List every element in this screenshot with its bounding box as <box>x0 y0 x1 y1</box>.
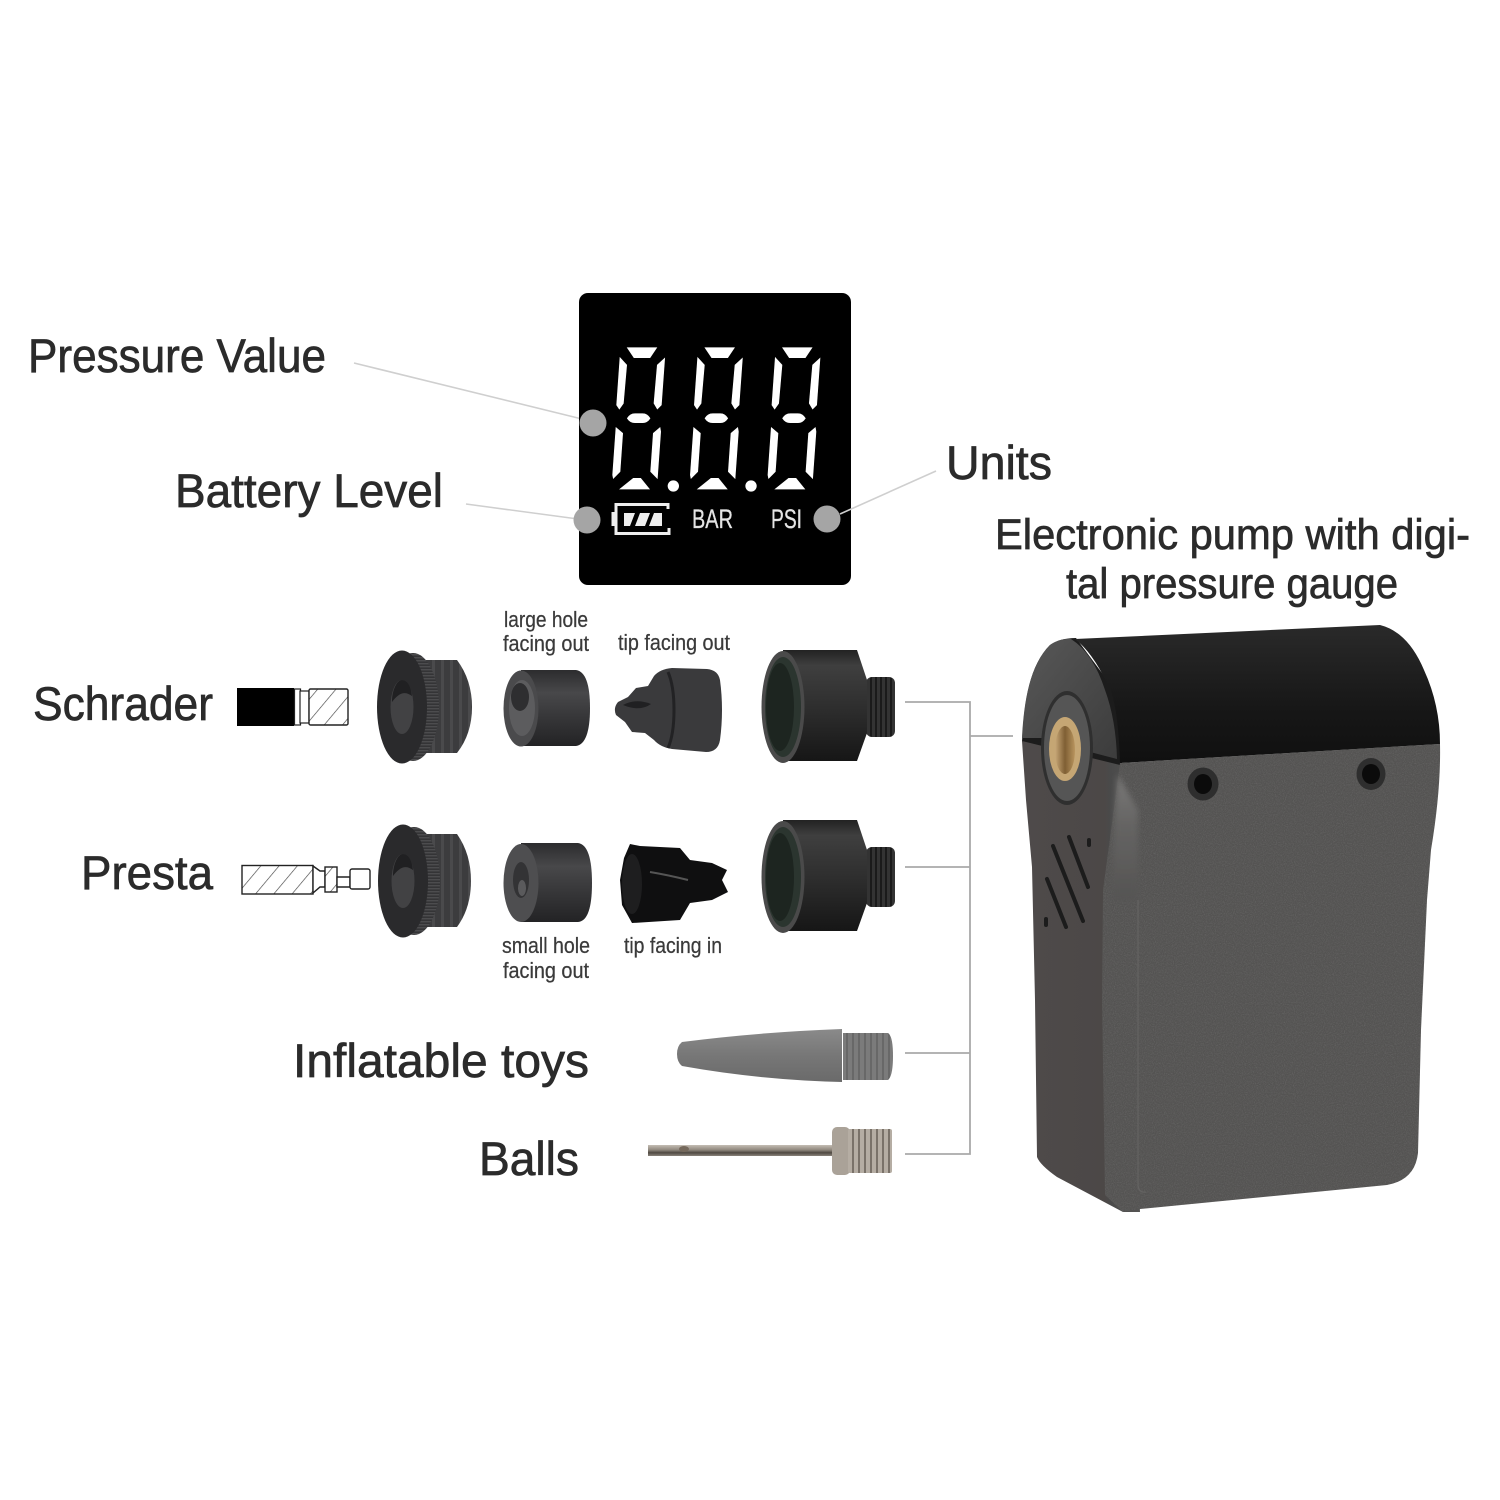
digit 2 <box>690 348 756 491</box>
pump body <box>1022 625 1440 1212</box>
icon: Presta valve <box>242 866 370 894</box>
unit label: PSI: PSI <box>771 504 802 534</box>
callout dot: units <box>814 506 840 532</box>
part: connector 1 <box>762 650 895 763</box>
pump dark underlay <box>1022 638 1122 766</box>
caption: small hole facing out: facing out <box>503 958 589 983</box>
icon: battery <box>612 504 669 534</box>
digit 1 <box>613 348 679 491</box>
pump vents <box>1046 837 1089 927</box>
label: pressure value: Pressure Value <box>28 329 326 382</box>
icon: Schrader valve <box>237 688 348 726</box>
pump front panel <box>1102 744 1440 1212</box>
leader line: pressure value <box>354 363 582 419</box>
callout dot: battery level <box>574 506 600 534</box>
heading: pump description: Electronic pump with digi- <box>995 511 1470 559</box>
pump front panel grain <box>1102 744 1440 1212</box>
heading: pump description <box>995 511 1470 608</box>
callout dot: pressure value <box>580 410 606 436</box>
part: tip facing in <box>620 844 728 923</box>
caption: large hole facing out: large hole <box>504 607 588 632</box>
pump front crease <box>1138 900 1146 1192</box>
digit 3 <box>768 348 820 489</box>
part: large hole insert <box>504 670 590 746</box>
part: connector 2 <box>762 820 895 933</box>
caption: tip facing out: tip facing out <box>618 630 730 655</box>
part: small hole insert <box>504 843 592 922</box>
pump screws <box>1188 758 1386 800</box>
part: Schrader knurled adapter <box>377 650 472 764</box>
caption: large hole facing out: facing out <box>503 631 589 656</box>
pump valve port <box>1041 691 1093 805</box>
pump edge highlight <box>1113 775 1138 900</box>
label: units: Units <box>946 436 1052 489</box>
part: Presta knurled adapter <box>378 824 471 938</box>
part: ball needle <box>648 1127 892 1175</box>
label: Presta: Presta <box>81 846 214 899</box>
label: battery level: Battery Level <box>175 464 443 517</box>
caption: large hole facing out <box>503 607 589 656</box>
pump black top cap <box>1075 625 1440 763</box>
leader line: units <box>840 471 936 514</box>
label: inflatable toys: Inflatable toys <box>293 1034 589 1087</box>
leader line: battery level <box>466 504 578 519</box>
panel: digital display <box>579 293 851 585</box>
part: tip facing out <box>615 668 722 752</box>
pump cap side face <box>1022 639 1117 759</box>
part: inflatable needle <box>677 1029 893 1082</box>
label: balls: Balls <box>479 1132 579 1185</box>
caption: small hole facing out <box>502 933 590 983</box>
caption: tip facing in: tip facing in <box>624 933 722 958</box>
caption: small hole facing out: small hole <box>502 933 590 958</box>
label: Schrader: Schrader <box>33 677 213 730</box>
heading: pump description: tal pressure gauge <box>1066 560 1398 608</box>
pump side panel <box>1022 741 1140 1212</box>
connector bracket <box>905 702 1013 1154</box>
unit label: BAR: BAR <box>692 504 733 534</box>
